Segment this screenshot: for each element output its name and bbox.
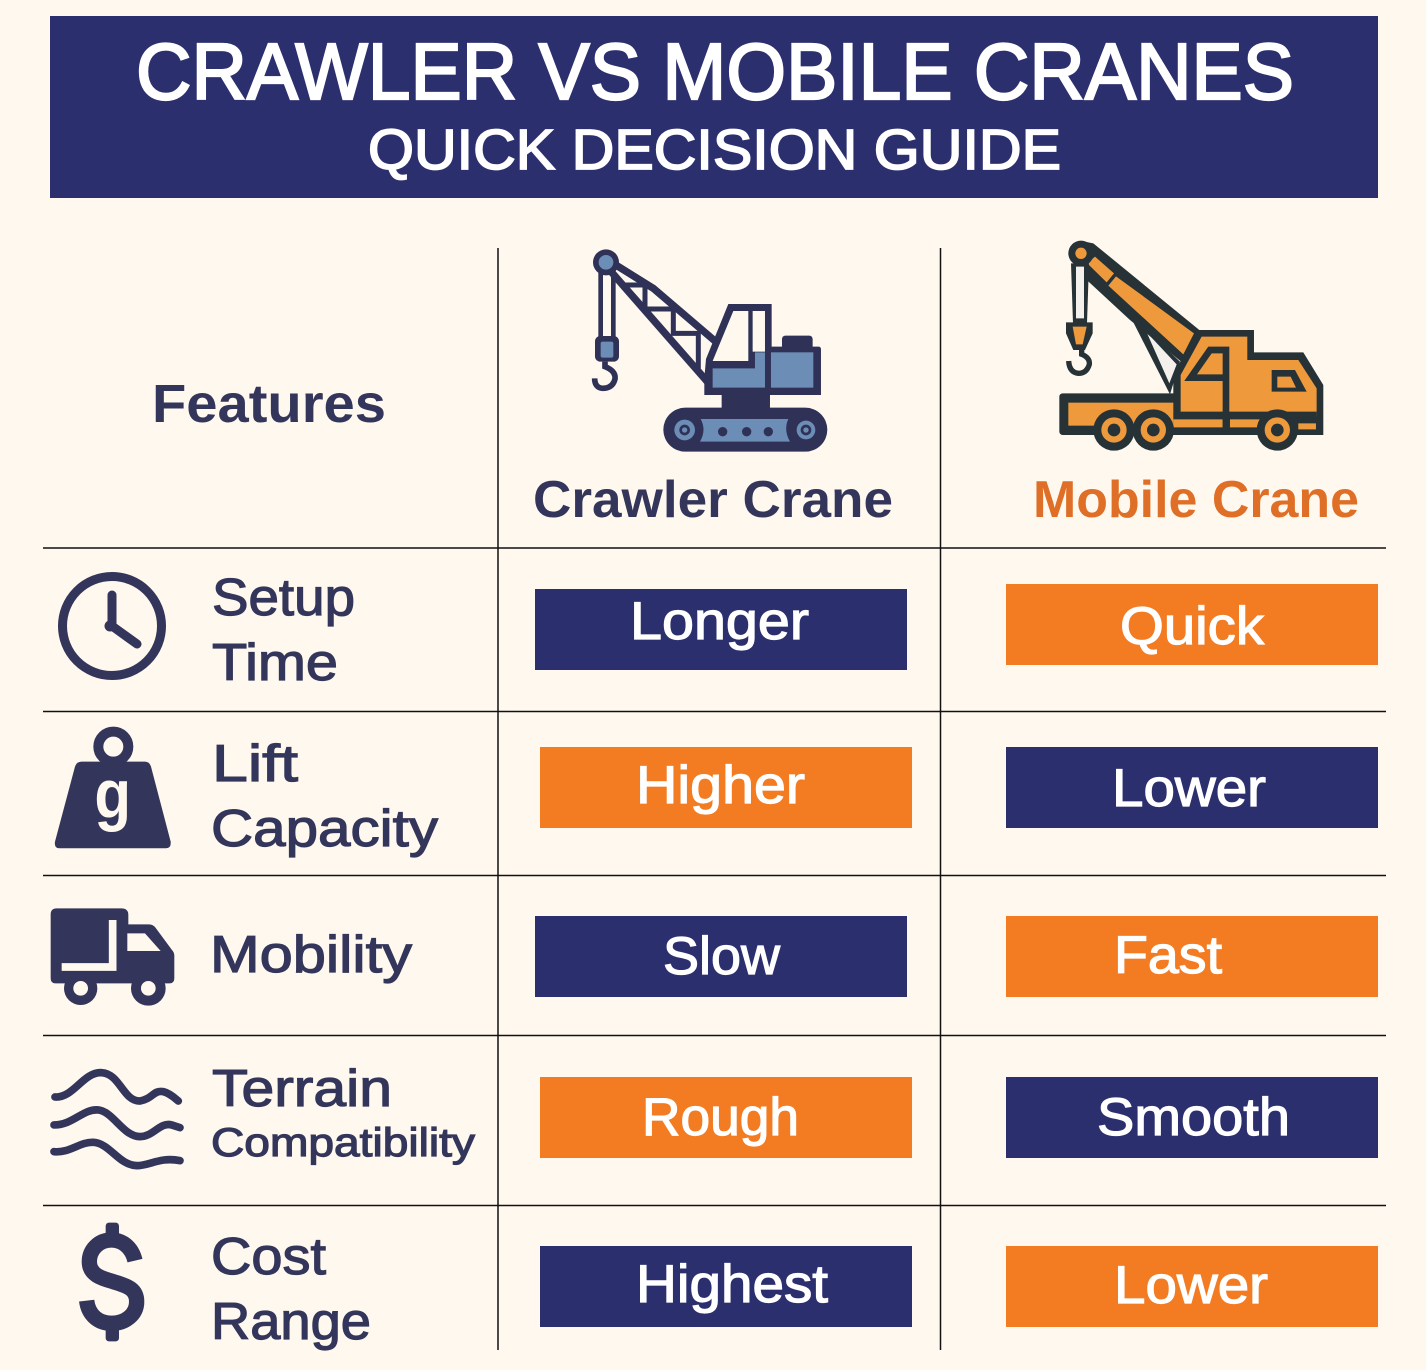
heading: crawler crane: Crawler Crane <box>533 471 893 529</box>
label: setup time: Time <box>212 634 338 692</box>
title banner <box>50 16 1378 198</box>
value: smooth: Smooth <box>1097 1088 1290 1147</box>
value: fast: Fast <box>1114 926 1222 985</box>
icon: truck <box>51 908 174 1006</box>
icon: weight <box>55 732 171 848</box>
icon: mobile crane <box>1059 241 1323 451</box>
value: longer: Longer <box>630 592 809 651</box>
value: quick: Quick <box>1120 597 1265 656</box>
value: higher: Higher <box>636 756 805 815</box>
subtitle: QUICK DECISION GUIDE <box>368 118 1061 182</box>
label: terrain compatibility <box>211 1060 475 1165</box>
value: rough <box>540 1077 912 1158</box>
label: cost range <box>211 1228 371 1351</box>
value: slow <box>535 916 907 997</box>
heading: mobile crane: Mobile Crane <box>1033 471 1359 529</box>
icon: weight: g <box>94 756 131 832</box>
icon: crawler crane <box>593 249 827 452</box>
icon: terrain waves <box>54 1073 180 1166</box>
heading: features: Features <box>152 374 386 434</box>
value: slow: Slow <box>663 927 781 986</box>
label: setup time <box>212 569 355 692</box>
value: highest <box>540 1246 912 1327</box>
value: lower cost <box>1006 1246 1378 1327</box>
label: cost range: Range <box>211 1293 371 1351</box>
label: lift capacity: Lift <box>212 735 299 793</box>
value: lower cost: Lower <box>1114 1256 1268 1315</box>
value: fast <box>1006 916 1378 997</box>
value: quick <box>1006 584 1378 665</box>
label: terrain compatibility: Compatibility <box>211 1121 475 1165</box>
label: mobility: Mobility <box>210 926 412 984</box>
label: terrain compatibility: Terrain <box>212 1060 392 1118</box>
value: highest: Highest <box>636 1255 828 1314</box>
label: cost range: Cost <box>211 1228 327 1286</box>
main title: CRAWLER VS MOBILE CRANES <box>136 27 1294 116</box>
label: lift capacity <box>211 735 438 858</box>
icon: dollar sign <box>87 1223 137 1341</box>
label: setup time: Setup <box>212 569 355 627</box>
value: smooth <box>1006 1077 1378 1158</box>
label: lift capacity: Capacity <box>211 800 438 858</box>
value: longer <box>535 589 907 670</box>
value: lower: Lower <box>1112 759 1266 818</box>
value: lower <box>1006 747 1378 828</box>
value: higher <box>540 747 912 828</box>
value: rough: Rough <box>642 1088 799 1147</box>
icon: clock <box>62 576 162 676</box>
